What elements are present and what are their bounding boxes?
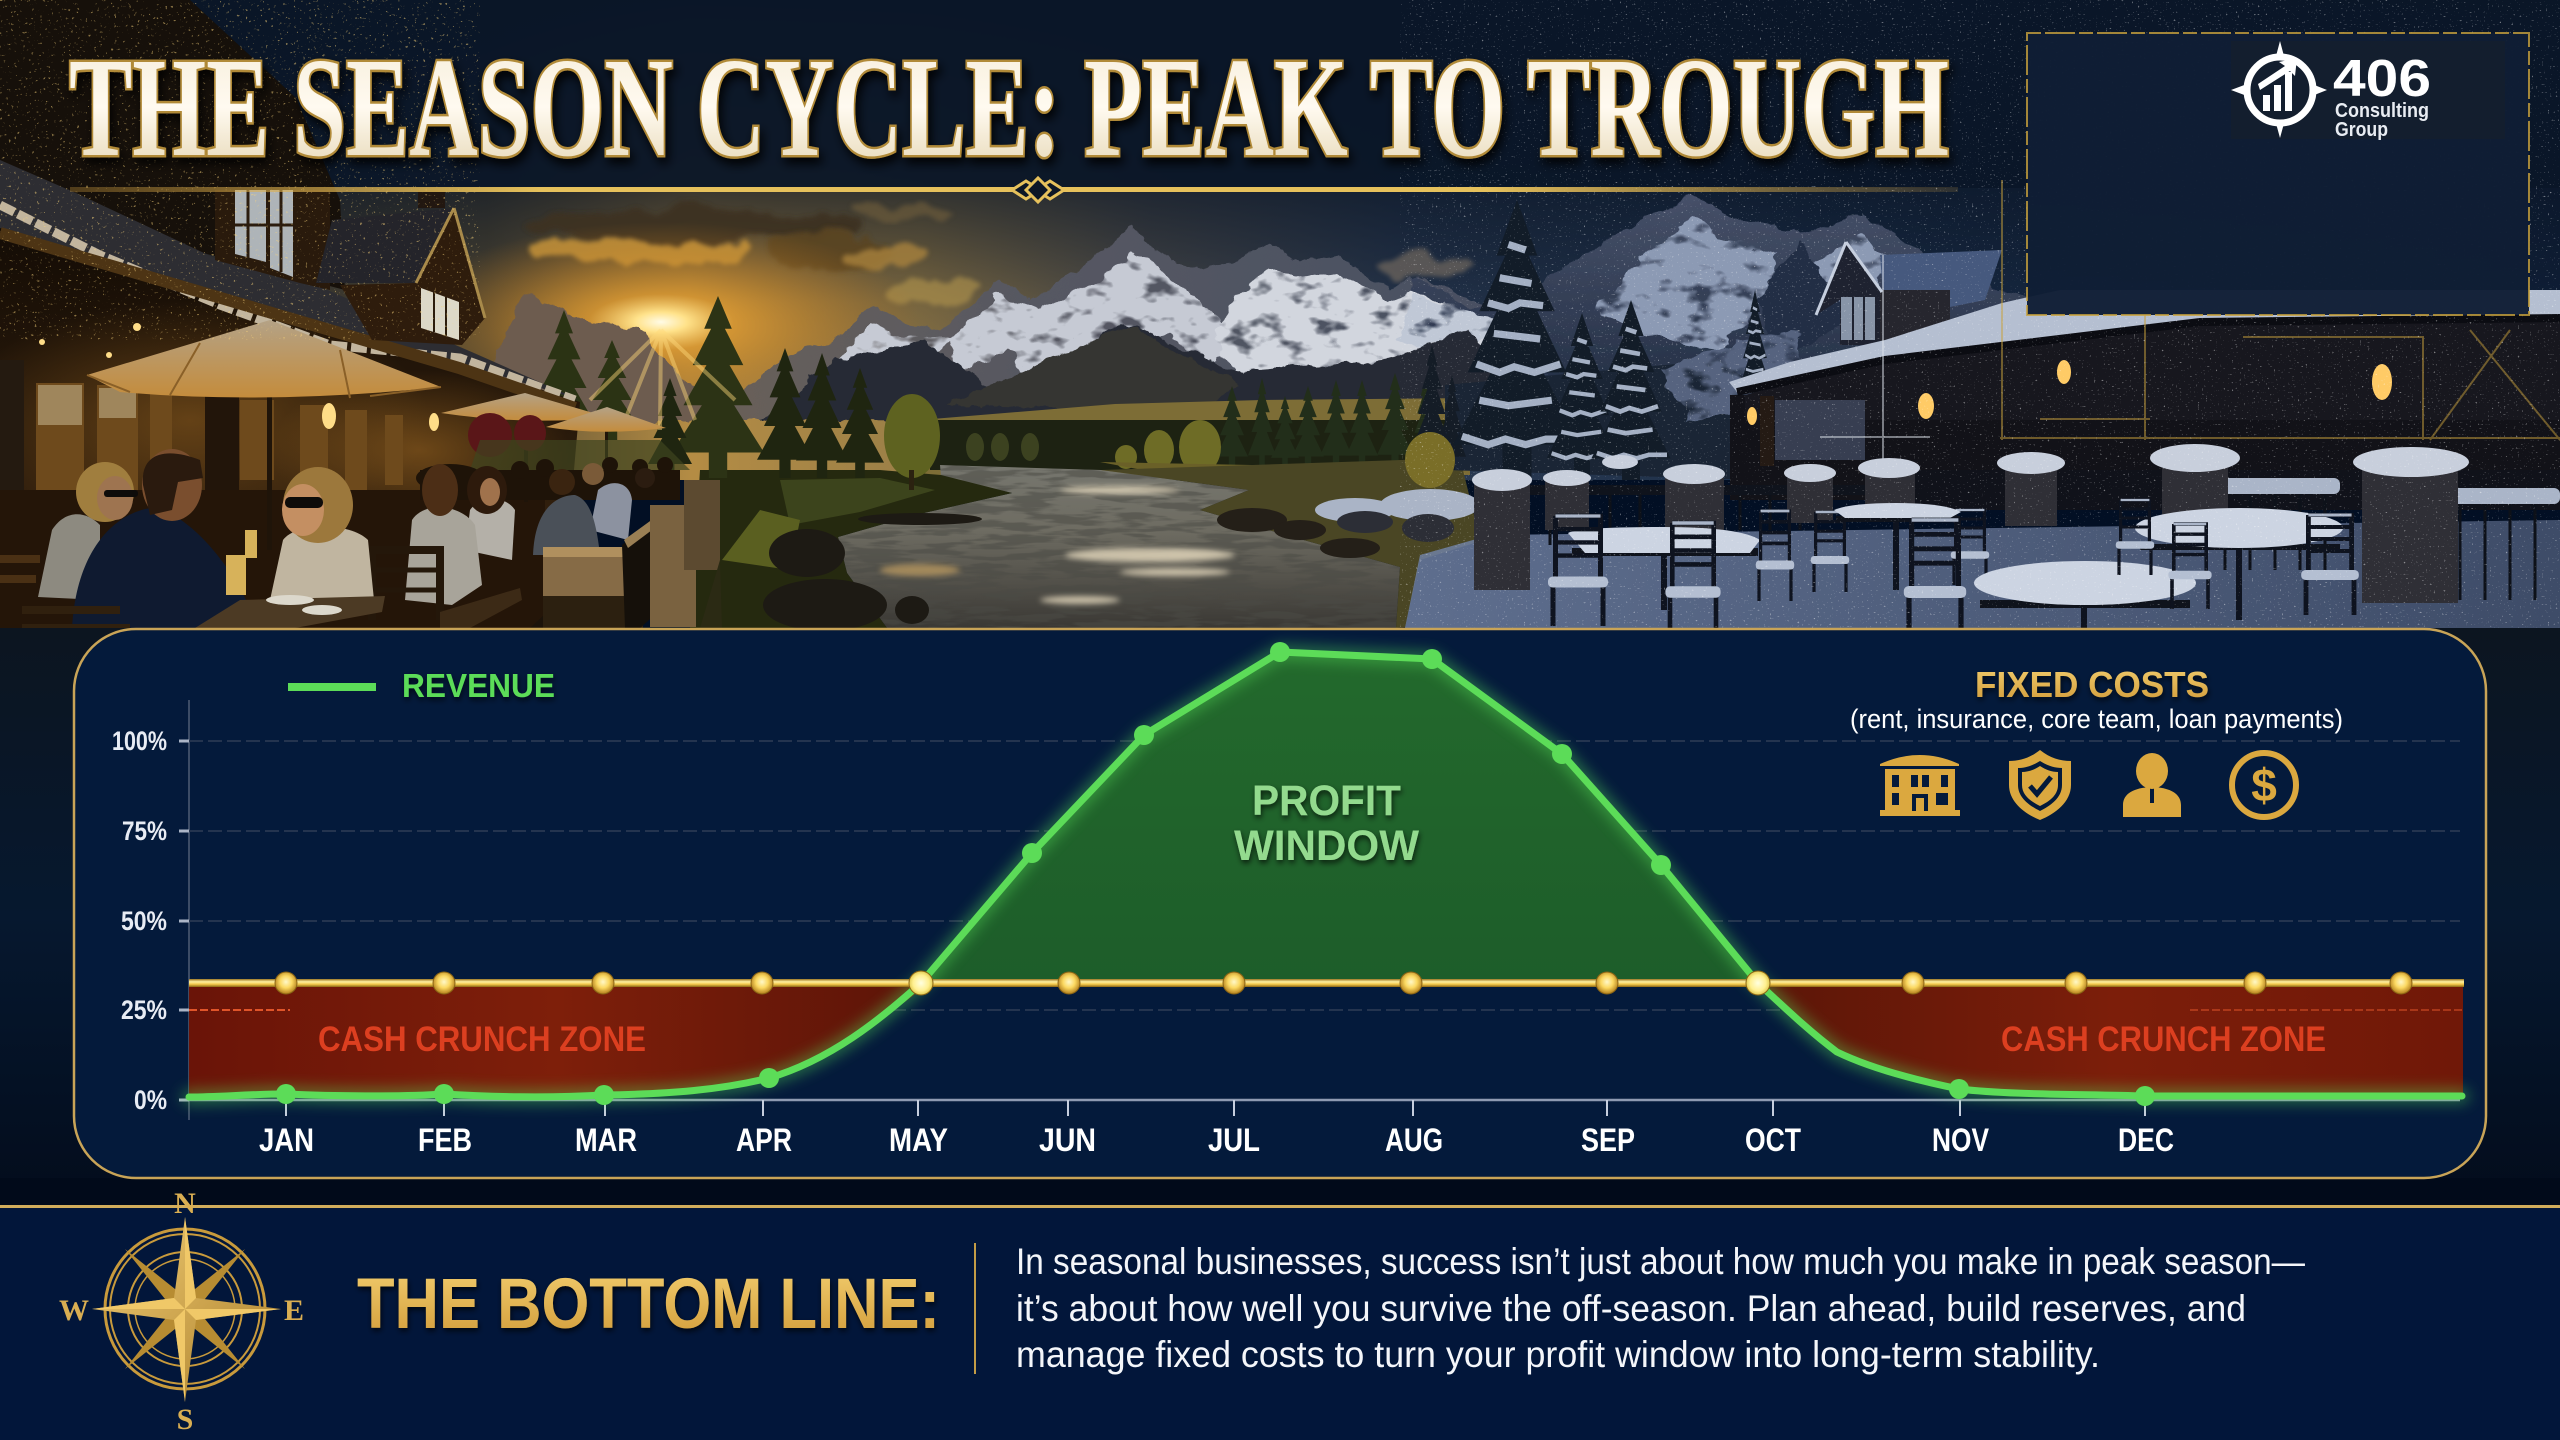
sunset trees (534, 296, 940, 490)
riverbanks (690, 458, 1500, 631)
compass letters (59, 1187, 304, 1436)
sky (0, 0, 2560, 480)
text block: bottom line message (1016, 1241, 2305, 1375)
panel: seasonal revenue chart (74, 629, 2486, 1178)
label: cash crunch zone right: CASH CRUNCH ZONE (2001, 1020, 2326, 1059)
icon: dollar coin (loan payments) (2232, 753, 2296, 817)
x axis month labels: MAR (575, 1122, 637, 1158)
x axis month labels: MAY (889, 1122, 948, 1158)
distant forest and meadow (920, 373, 1470, 490)
y axis labels: 25% (121, 995, 167, 1025)
icon: dollar coin (loan payments): $ (2251, 759, 2277, 811)
y axis labels: 100% (112, 726, 167, 756)
heading: the bottom line: THE BOTTOM LINE: (357, 1265, 940, 1344)
x axis month labels: JUL (1208, 1122, 1260, 1158)
winter lodge (1729, 242, 2560, 500)
stone terrace wall (530, 480, 722, 628)
legend: revenue (288, 667, 555, 704)
logo panel: dashed gold box (2027, 33, 2529, 315)
x axis month labels: SEP (1581, 1122, 1635, 1158)
compass letters: N (174, 1187, 196, 1220)
chart axes and gridlines (179, 700, 2460, 1120)
logo wordmark: 406 (2333, 50, 2431, 108)
x axis month labels: OCT (1745, 1122, 1801, 1158)
label: profit window: WINDOW (1234, 822, 1419, 870)
fixed costs line (189, 979, 2464, 987)
x axis month labels: NOV (1932, 1122, 1990, 1158)
y axis labels: 50% (121, 906, 167, 936)
title backdrop (0, 0, 2560, 188)
river (830, 460, 1410, 630)
scene: dual-season hero photograph (0, 0, 2560, 640)
logo compass icon (2231, 41, 2327, 138)
label: profit window: PROFIT (1252, 777, 1401, 825)
fixed costs legend (1850, 664, 2343, 820)
patio umbrellas (87, 320, 690, 550)
text block: bottom line message: In seasonal businesses, success isn’t just about how much you make in peak season— (1016, 1241, 2305, 1282)
25 percent dashed marker (189, 1009, 2462, 1011)
legend: revenue: REVENUE (402, 667, 555, 704)
compass letters: S (177, 1403, 193, 1436)
logo: 406 Consulting Group: Group (2335, 119, 2388, 141)
patio floor (0, 490, 545, 628)
divider (974, 1243, 976, 1374)
x axis month labels: JAN (259, 1122, 314, 1158)
x axis month labels: DEC (2118, 1122, 2174, 1158)
title divider with ornament (70, 178, 1958, 202)
logo: 406 Consulting Group: Consulting (2335, 100, 2429, 122)
mountains (470, 195, 2030, 430)
y axis labels (112, 726, 167, 1115)
x axis month labels: APR (736, 1122, 792, 1158)
icon: shield (insurance) (2009, 750, 2071, 820)
text block: bottom line message: manage fixed costs to turn your profit window into long-term stability. (1016, 1334, 2100, 1375)
text block: bottom line message: it’s about how well you survive the off-season. Plan ahead, build reserves, and (1016, 1288, 2246, 1329)
fixed costs legend: FIXED COSTS (1975, 664, 2209, 705)
y axis labels: 0% (134, 1085, 167, 1115)
diners (0, 449, 680, 628)
side fade below scene (0, 628, 2560, 1206)
logo: 406 Consulting Group (2231, 41, 2505, 141)
bottom band (0, 1205, 2560, 1440)
profit window area (921, 652, 1758, 983)
revenue line (189, 652, 2462, 1097)
label: profit window (1234, 777, 1419, 870)
summer lodge (0, 0, 580, 628)
x axis month labels: JUN (1039, 1122, 1096, 1158)
x axis month labels: FEB (418, 1122, 472, 1158)
x axis month labels (259, 1122, 2174, 1158)
icon: person (core team) (2123, 753, 2181, 817)
revenue markers (276, 642, 2155, 1106)
icon: building (rent) (1880, 755, 1960, 816)
winter trees (1405, 200, 1800, 488)
blueprint overlay lines (1820, 180, 2560, 460)
y axis labels: 75% (122, 816, 167, 846)
fixed costs legend: (rent, insurance, core team, loan payments) (1850, 704, 2343, 734)
icon: compass rose (59, 1187, 304, 1436)
speckle texture (0, 0, 2560, 628)
compass letters: W (59, 1294, 89, 1327)
snowy terrace (1405, 444, 2560, 640)
cash crunch zone: right area (1765, 987, 2463, 1096)
label: cash crunch zone left: CASH CRUNCH ZONE (318, 1020, 646, 1059)
compass letters: E (284, 1294, 304, 1327)
fixed cost markers (275, 971, 2412, 995)
cash crunch zone: left area (189, 987, 925, 1097)
x axis month labels: AUG (1385, 1122, 1443, 1158)
sun rays (590, 330, 735, 430)
